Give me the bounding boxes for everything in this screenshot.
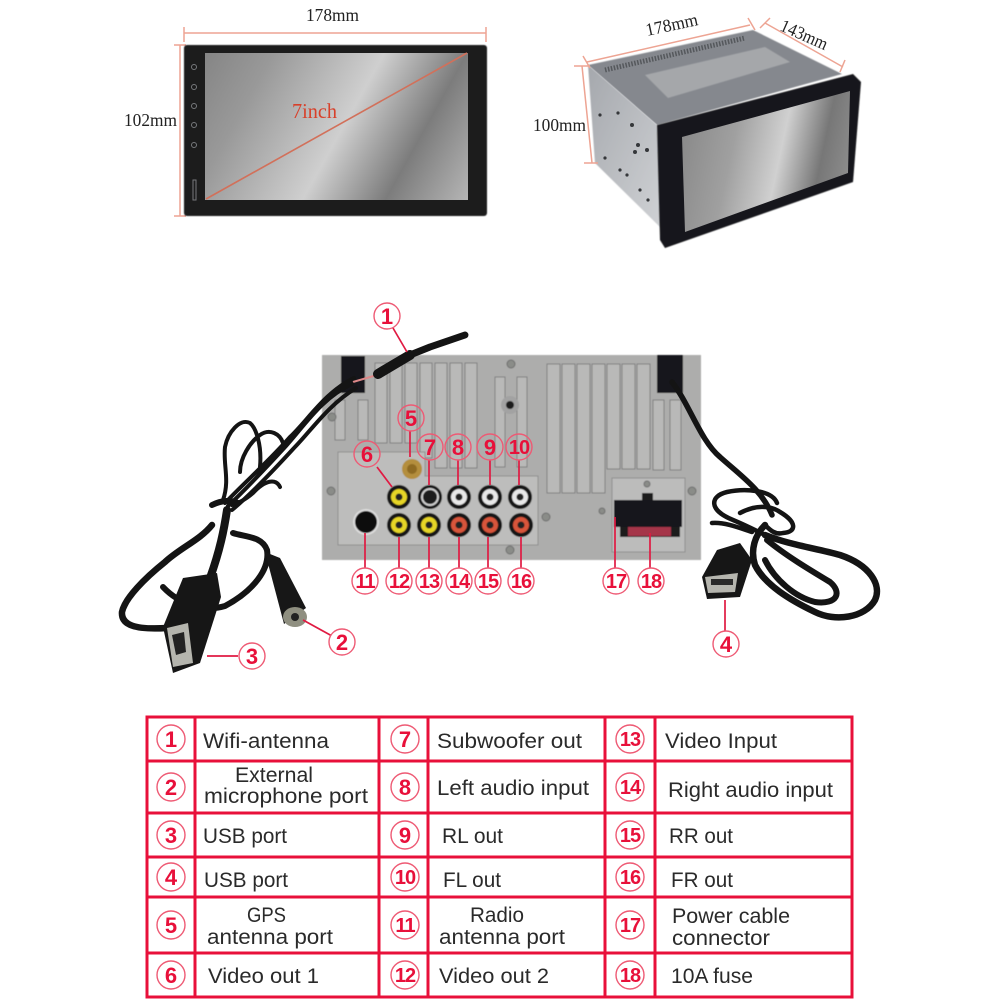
front bezel	[657, 74, 861, 248]
row 3: 3	[165, 823, 177, 848]
table grid	[147, 717, 852, 997]
callout 16: 16	[511, 571, 532, 593]
microphone jack	[265, 552, 307, 627]
callout 13: 13	[419, 571, 440, 593]
rear panel	[322, 355, 701, 560]
row 5: connector	[672, 927, 770, 950]
row 1: 1	[165, 727, 177, 752]
wifi antenna	[353, 335, 465, 382]
row 3: RR out	[669, 825, 733, 848]
callout 8: 8	[452, 435, 464, 460]
row 1: Subwoofer out	[437, 730, 582, 753]
callout 6: 6	[361, 442, 373, 467]
screen	[205, 53, 468, 200]
row 5: Radio	[470, 904, 524, 927]
callout 2: 2	[336, 630, 348, 655]
row 4: 10	[395, 867, 416, 889]
callout 3: 3	[246, 644, 258, 669]
cable knot	[212, 501, 238, 505]
row 6: 18	[620, 965, 641, 987]
callout 17: 17	[606, 571, 627, 593]
row 4: 16	[620, 867, 641, 889]
row 2: Left audio input	[437, 777, 589, 800]
callout 11	[352, 533, 378, 594]
row 5	[157, 904, 790, 950]
microphone cable	[163, 533, 267, 608]
radio antenna socket	[353, 509, 379, 535]
power connector	[614, 493, 682, 537]
right USB socket	[702, 543, 752, 599]
row 5: antenna port	[439, 926, 565, 949]
callout 10: 10	[509, 437, 530, 459]
callout 2	[303, 620, 355, 655]
top cover	[588, 30, 842, 125]
right cable clamp	[657, 355, 683, 393]
USB cable stem	[210, 510, 227, 578]
row 5: 17	[620, 915, 641, 937]
callout 17	[603, 517, 629, 594]
callout 10	[506, 434, 532, 485]
callout 9	[477, 434, 503, 485]
callout 14: 14	[449, 571, 471, 593]
screen size label: 7inch	[292, 99, 337, 123]
callout 5	[398, 405, 424, 457]
row 2: Right audio input	[668, 779, 833, 802]
port recess	[338, 452, 538, 545]
cooling fins	[335, 363, 681, 493]
row 2: microphone port	[204, 785, 368, 808]
row 6: Video out 1	[208, 965, 319, 988]
height label: 102mm	[124, 110, 177, 130]
row 3: 9	[399, 823, 411, 848]
top label	[645, 47, 790, 98]
row 2: 8	[399, 775, 411, 800]
width label: 178mm	[306, 5, 359, 25]
front screen	[682, 91, 850, 232]
GPS gold connector	[402, 459, 422, 479]
height label: 100mm	[533, 115, 586, 135]
row 6: 12	[395, 965, 416, 987]
row 2: External	[235, 764, 313, 787]
callout 7: 7	[424, 435, 436, 460]
cable descent	[672, 382, 772, 515]
long cable loop to USB	[122, 525, 212, 628]
row 4: FR out	[671, 869, 733, 892]
inner loop	[765, 540, 837, 602]
row 5: antenna port	[207, 926, 333, 949]
left USB socket	[163, 573, 221, 673]
depth label: 143mm	[777, 15, 831, 54]
row 1: Video Input	[665, 730, 777, 753]
antenna and left cables	[122, 335, 465, 673]
row 5: 11	[395, 915, 415, 937]
row 1: 13	[620, 729, 641, 751]
callout 1	[374, 303, 407, 352]
callout 5: 5	[405, 406, 417, 431]
row 6: 6	[165, 963, 177, 988]
row 6	[157, 961, 753, 989]
row 4	[157, 863, 733, 892]
side holes	[598, 111, 650, 202]
callout 4: 4	[720, 632, 733, 657]
callout 12: 12	[389, 571, 410, 593]
side plate	[588, 65, 663, 230]
row 4: FL out	[443, 869, 501, 892]
row 4: 4	[165, 865, 178, 890]
callout 18	[638, 533, 664, 594]
perspective view of head unit	[533, 9, 861, 248]
row 3: 15	[620, 825, 641, 847]
callout 13	[416, 537, 442, 594]
cable loops	[223, 422, 283, 505]
row 4: USB port	[204, 869, 288, 892]
device bezel	[184, 45, 487, 216]
row 5: GPS	[247, 904, 286, 927]
diagonal line	[206, 53, 467, 199]
connector recess	[612, 478, 685, 552]
row 1: 7	[399, 727, 411, 752]
cable bundle	[225, 378, 356, 510]
callout 18: 18	[641, 571, 662, 593]
upper loops	[712, 490, 793, 535]
callout 6	[354, 441, 392, 487]
callout 9: 9	[484, 435, 496, 460]
row 3: USB port	[203, 825, 287, 848]
port legend table	[147, 717, 852, 997]
callout 16	[508, 537, 534, 594]
depth width label: 178mm	[644, 9, 700, 40]
row 2: 2	[165, 775, 177, 800]
row 6: 10A fuse	[671, 965, 753, 988]
side buttons	[192, 64, 196, 200]
row 2	[157, 764, 833, 808]
callout 11: 11	[355, 571, 375, 593]
big outer loop	[753, 525, 877, 617]
height dimension line	[174, 45, 186, 216]
callout 3	[207, 643, 265, 669]
row 3: RL out	[442, 825, 503, 848]
mounting hole	[501, 396, 519, 414]
right cables	[672, 382, 877, 617]
callout 8	[445, 434, 471, 485]
callout 1: 1	[381, 304, 393, 329]
screws	[327, 360, 696, 554]
row 5: 5	[165, 913, 177, 938]
callout 4	[713, 600, 739, 657]
row 1: Wifi-antenna	[203, 730, 329, 753]
width dimension line	[184, 27, 486, 42]
row 3	[157, 821, 733, 849]
dimension lines	[574, 18, 845, 163]
metal chassis	[322, 355, 701, 560]
RCA jacks	[387, 485, 533, 537]
callout 14	[446, 537, 472, 594]
left cable clamp	[341, 356, 365, 393]
row 2: 14	[620, 777, 642, 799]
callout 15	[475, 537, 501, 594]
row 1	[157, 725, 777, 753]
top vents	[605, 38, 745, 70]
callout 15: 15	[478, 571, 499, 593]
front view of head unit	[124, 5, 487, 216]
callout 7	[417, 434, 443, 485]
row 6: Video out 2	[439, 965, 549, 988]
callout 12	[386, 537, 412, 594]
row 5: Power cable	[672, 905, 790, 928]
